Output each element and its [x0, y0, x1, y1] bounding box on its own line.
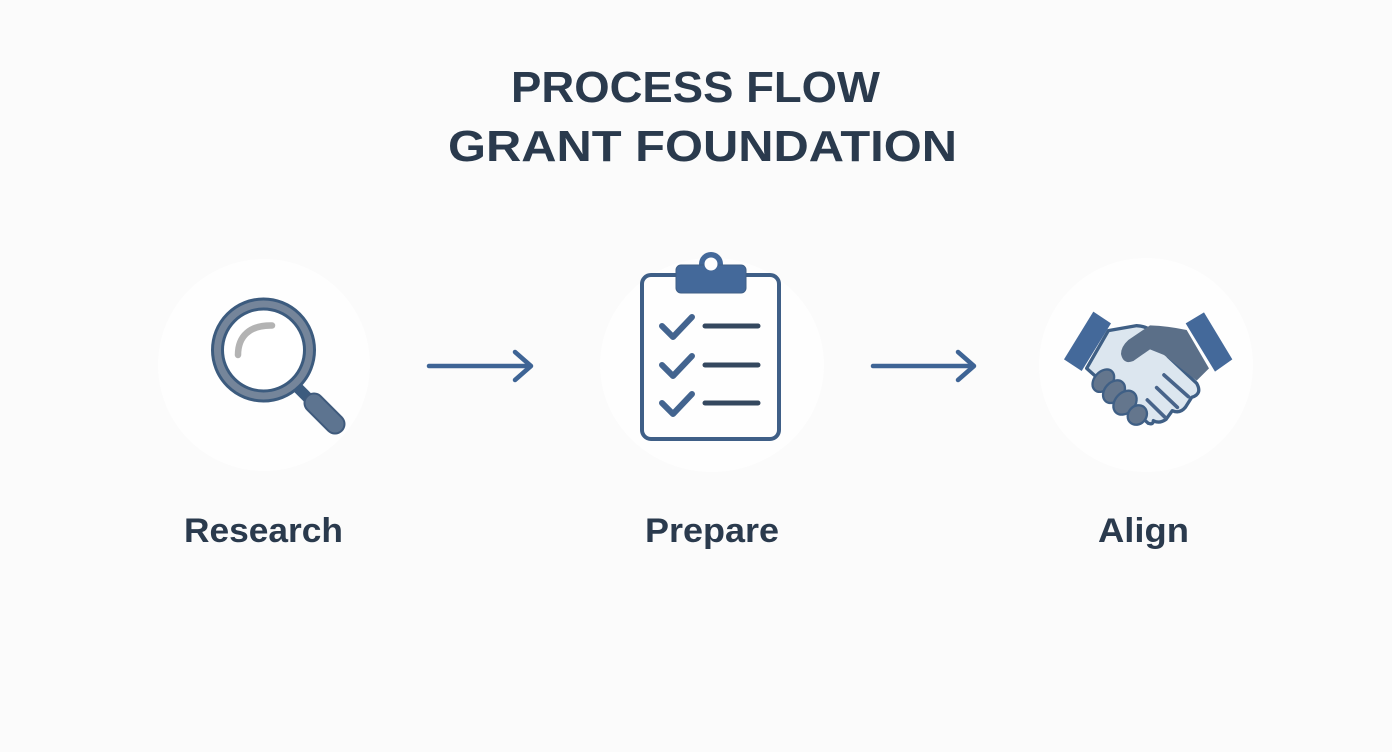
step: align: [1039, 258, 1253, 472]
label: research: Research: [184, 512, 343, 550]
step: prepare: [600, 252, 824, 472]
checklist row 2: [662, 356, 758, 376]
arrow: research to prepare: [429, 352, 531, 380]
label: align: Align: [1098, 512, 1189, 550]
icon circle: prepare: [600, 258, 824, 472]
step: research: [158, 259, 370, 471]
icon circle: research: [158, 259, 370, 471]
dark hand: [1121, 325, 1209, 381]
light hand: [1087, 326, 1199, 424]
label: prepare: Prepare: [645, 512, 779, 550]
icon: clipboard checklist: [642, 252, 779, 439]
checklist row 3: [662, 394, 758, 414]
title: PROCESS FLOW: [511, 63, 880, 112]
knuckles: [1088, 365, 1151, 429]
icon circle: align: [1039, 258, 1253, 472]
title: GRANT FOUNDATION: [448, 122, 957, 171]
right cuff: [1186, 312, 1232, 372]
arrow: prepare to align: [873, 352, 974, 380]
icon: magnifying glass: [218, 304, 335, 424]
icon: handshake: [1064, 312, 1232, 429]
checklist row 1: [662, 317, 758, 337]
left cuff: [1064, 312, 1111, 371]
title: [448, 63, 957, 171]
